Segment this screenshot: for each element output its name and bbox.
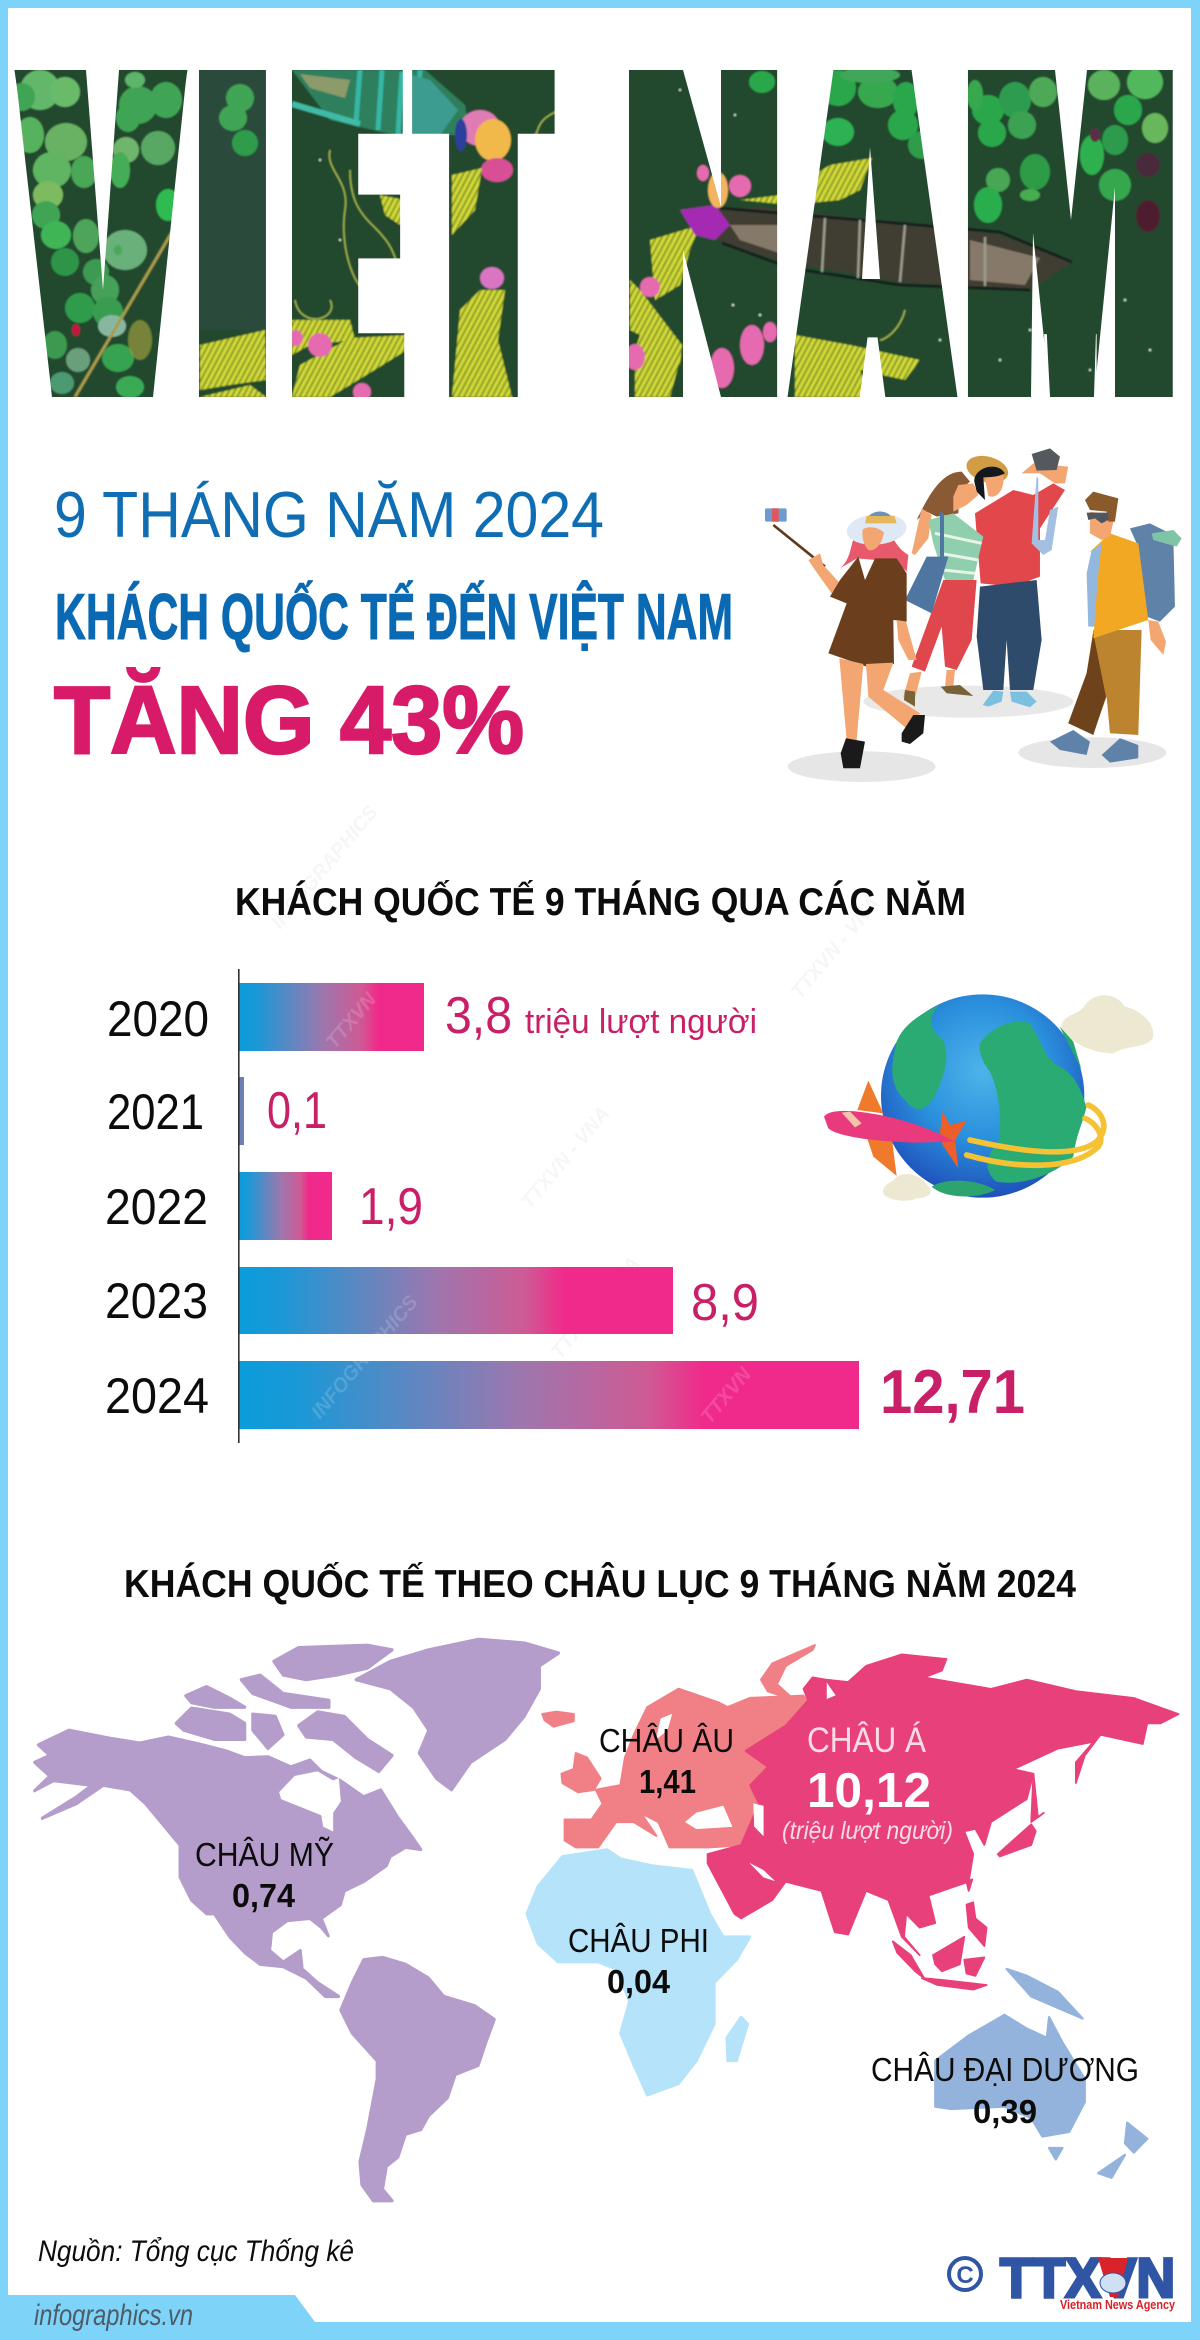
map: Europe <box>542 1645 815 1847</box>
photo: wooden boat with teal frame, top <box>292 70 470 135</box>
tourist: woman with selfie stick <box>765 508 925 768</box>
heading: khach quoc te den Viet Nam: KHÁCH QUỐC TẾ ĐẾN VIỆT NAM <box>55 580 733 653</box>
label: Africa: CHÂU PHI <box>568 1922 709 1959</box>
bar 2023: 8,9 <box>691 1274 759 1332</box>
bar 2023: 2023 <box>105 1273 208 1329</box>
label: Asia: 10,12 <box>807 1764 931 1818</box>
tagline: Vietnam News Agency <box>1060 2297 1176 2312</box>
illustration: globe with plane and clouds <box>824 994 1153 1201</box>
label: Asia: (triệu lượt người) <box>782 1817 953 1845</box>
plane <box>824 1081 967 1176</box>
rings <box>967 1105 1104 1165</box>
watermarks over the bars: TTXVN <box>697 1363 756 1428</box>
label: Asia: CHÂU Á <box>807 1721 927 1760</box>
watermarks on the white background: TTXVN - VNA <box>547 1253 645 1363</box>
bar 2024 <box>105 1358 1025 1429</box>
illustration: group of tourists <box>765 448 1182 782</box>
cloud bottom <box>883 1174 931 1201</box>
bar 2021 <box>107 1077 327 1145</box>
copyright mark: C <box>956 2262 974 2289</box>
map: Africa <box>527 1850 750 2095</box>
label: Oceania: 0,39 <box>973 2093 1037 2130</box>
label: Oceania: CHÂU ĐẠI DƯƠNG <box>871 2051 1139 2088</box>
bar 2021: 2021 <box>107 1084 204 1140</box>
watermarks on the white background <box>267 801 885 1363</box>
photo: pink flowers <box>289 165 777 401</box>
label: Americas <box>195 1836 334 1914</box>
bar 2024: 12,71 <box>880 1358 1025 1427</box>
wordmark: TTXVN <box>1000 2246 1175 2309</box>
watermarks on the white background: INFOGRAPHICS <box>267 801 383 933</box>
label: Europe <box>599 1722 734 1800</box>
watermarks over the bars: TTXVN <box>322 988 381 1053</box>
cloud right <box>1061 995 1153 1053</box>
section heading: visitors over the years: KHÁCH QUỐC TẾ 9 THÁNG QUA CÁC NĂM <box>235 879 966 924</box>
label: Americas: CHÂU MỸ <box>195 1836 334 1873</box>
tourist: man with camera <box>963 448 1068 707</box>
watermarks over the bars <box>307 988 756 1428</box>
map: the Americas and Greenland <box>34 1639 559 2201</box>
photo: thin green reed lines <box>295 110 905 340</box>
bar 2022 <box>105 1172 423 1240</box>
bar 2020: 3,8 <box>445 987 512 1045</box>
bar 2022: 2022 <box>105 1179 208 1235</box>
label: Oceania <box>871 2051 1139 2130</box>
photo: lily pads left <box>9 70 258 398</box>
source note: Nguồn: Tổng cục Thống kê <box>38 2235 354 2268</box>
bar 2020: 2020 <box>107 991 209 1047</box>
label: Africa <box>568 1922 709 2000</box>
bar chart: international visitors 2020-2024 <box>105 969 1025 1443</box>
bar 2022: 1,9 <box>359 1178 423 1236</box>
photo: yellow reeds <box>200 158 920 397</box>
label: Africa: 0,04 <box>607 1963 671 2000</box>
photo: woman in conical hat <box>460 110 500 146</box>
bar 2020 <box>107 983 757 1051</box>
title: VIET NAM lettering filled with river photo <box>0 60 1200 405</box>
heading: 9 thang nam 2024: 9 THÁNG NĂM 2024 <box>54 478 604 551</box>
label: Europe: CHÂU ÂU <box>599 1722 734 1759</box>
photo: lily pads right <box>749 65 1168 223</box>
watermarks on the white background: TTXVN - VNA <box>517 1103 615 1213</box>
heading: tang 43%: TĂNG 43% <box>54 667 524 774</box>
watermarks on the white background: TTXVN - VNA <box>787 893 885 1003</box>
map: Asia <box>708 1654 1179 1990</box>
label: Europe: 1,41 <box>639 1763 696 1800</box>
bar 2024: 2024 <box>105 1368 209 1424</box>
watermarks over the bars: INFOGRAPHICS <box>307 1291 423 1423</box>
footer site name: infographics.vn <box>34 2299 193 2332</box>
footer tab <box>0 2295 315 2340</box>
tourist: man with backpack <box>1050 492 1182 763</box>
bar 2023 <box>105 1267 759 1334</box>
copyright mark <box>949 2258 981 2290</box>
photo: wooden boat with woman <box>700 207 1072 290</box>
section heading: visitors by continent: KHÁCH QUỐC TẾ THEO CHÂU LỤC 9 THÁNG NĂM 2024 <box>124 1561 1076 1606</box>
map: Oceania <box>935 1969 1147 2178</box>
logo: TTXVN <box>949 2246 1176 2312</box>
globe <box>881 994 1087 1198</box>
label: Americas: 0,74 <box>232 1877 296 1914</box>
label: Asia <box>782 1721 953 1845</box>
world map <box>34 1639 1179 2201</box>
tourist: woman in striped shirt <box>903 472 983 707</box>
photo: water speckles <box>319 89 1151 371</box>
bar 2020: triệu lượt người <box>525 1003 757 1041</box>
bar 2021: 0,1 <box>267 1082 327 1140</box>
